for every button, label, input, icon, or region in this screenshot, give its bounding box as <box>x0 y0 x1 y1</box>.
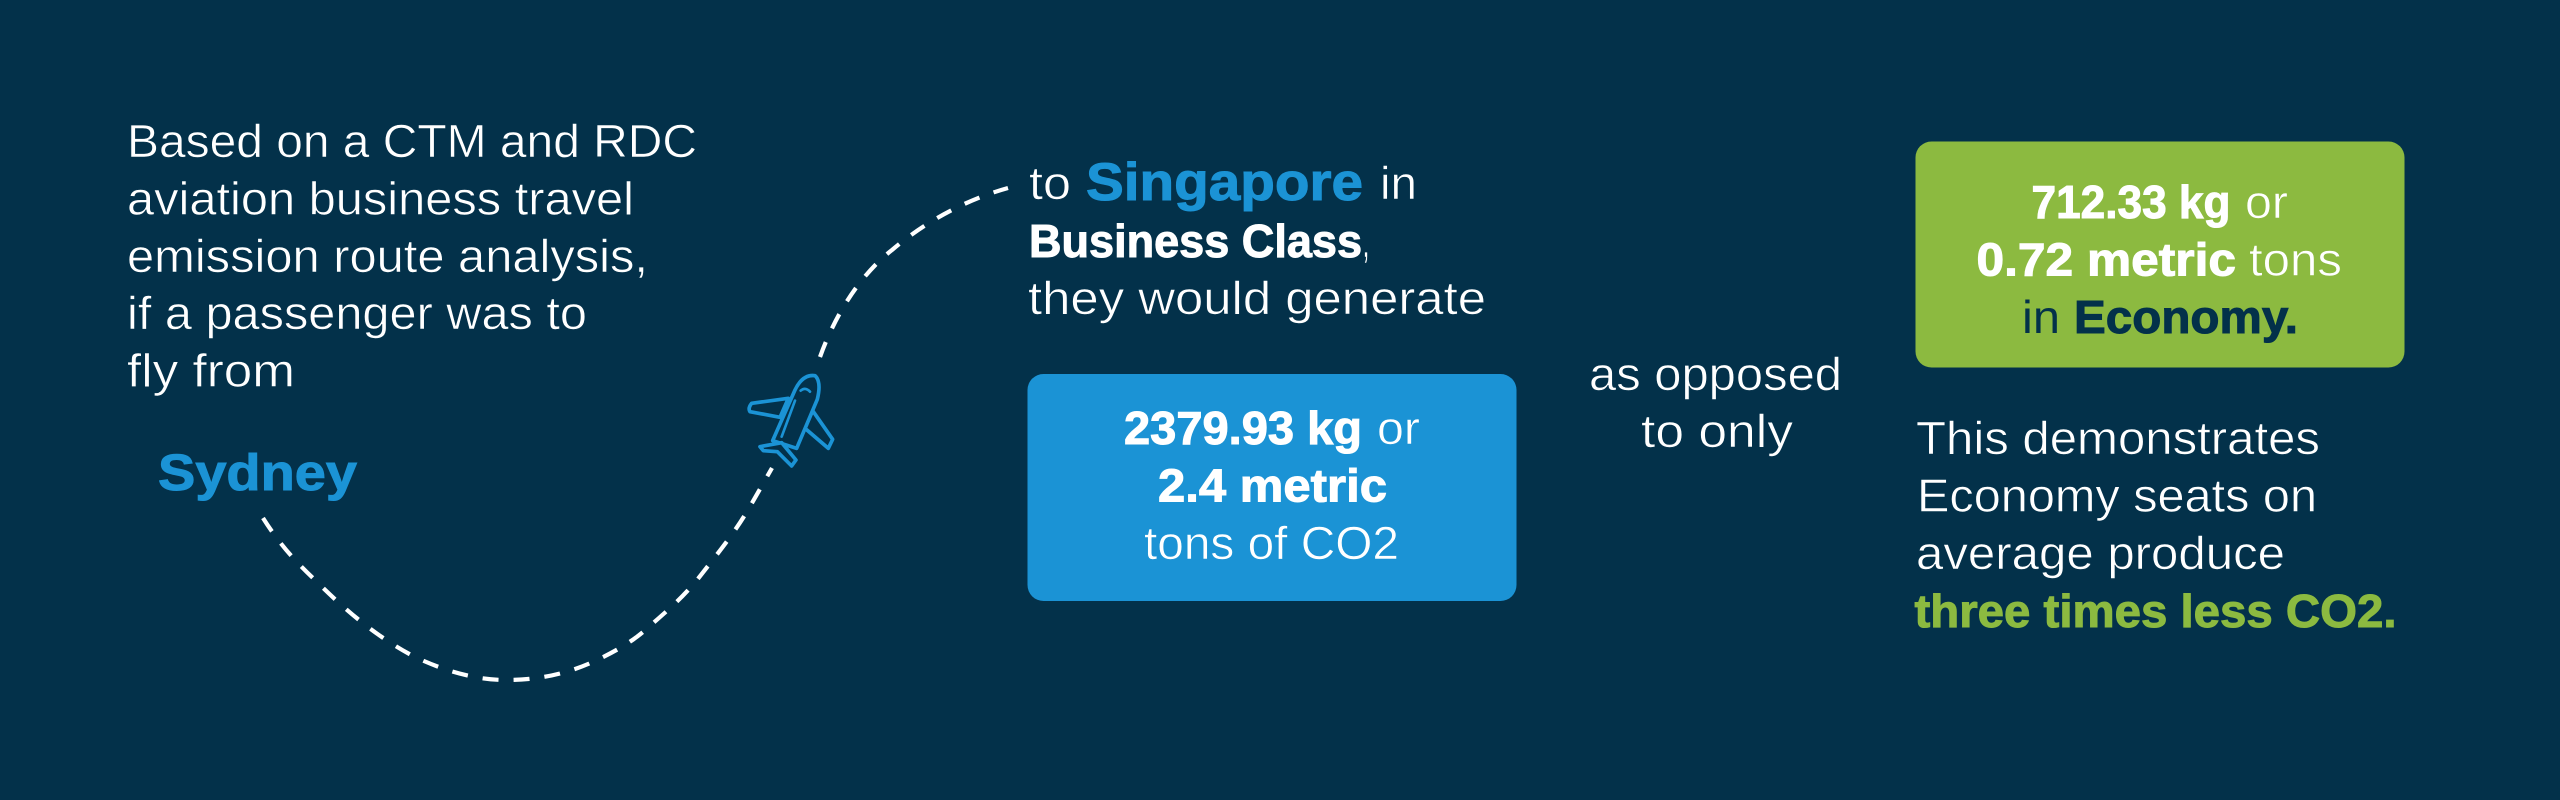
text block: destination: , <box>1362 215 1370 267</box>
text block: destination: they would generate <box>1028 272 1486 324</box>
panel: business class emissions: 2.4 metric <box>1158 460 1387 512</box>
text block: conclusion: Economy seats on <box>1917 470 2317 522</box>
icon: airplane <box>749 376 833 466</box>
text block: as opposed to only <box>1589 348 1842 457</box>
text block: destination <box>1028 153 1486 324</box>
panel: business class emissions: or <box>1377 402 1420 454</box>
panel: economy emissions: 712.33 kg <box>2032 176 2230 228</box>
text block: conclusion <box>1914 412 2396 637</box>
text block: intro <box>127 115 697 396</box>
text block: conclusion: three times less CO2. <box>1914 585 2396 637</box>
text block: intro: emission route analysis, <box>127 230 648 282</box>
text block: as opposed to only: as opposed <box>1589 348 1842 400</box>
text block: intro: if a passenger was to <box>127 287 587 339</box>
panel: economy emissions <box>1916 142 2404 368</box>
panel: economy emissions: 0.72 metric <box>1976 234 2236 286</box>
text block: destination: in <box>1380 157 1417 209</box>
panel: economy emissions: Economy. <box>2074 291 2298 343</box>
text block: conclusion: average produce <box>1916 527 2285 579</box>
text block: intro: Based on a CTM and RDC <box>127 115 697 167</box>
text block: intro: aviation business travel <box>127 172 634 224</box>
panel: economy emissions: or <box>2245 176 2288 228</box>
panel: economy emissions: tons <box>2249 234 2342 286</box>
text block: destination: Business Class <box>1029 215 1362 267</box>
text block: destination: Singapore <box>1086 153 1363 212</box>
panel: business class emissions <box>1028 374 1516 601</box>
panel: economy emissions: in <box>2022 291 2060 343</box>
origin label: Sydney: Sydney <box>158 444 358 501</box>
text block: conclusion: This demonstrates <box>1916 412 2320 464</box>
arrow: dashed flight route <box>263 188 1008 680</box>
panel: business class emissions: tons of CO2 <box>1144 517 1399 569</box>
text block: as opposed to only: to only <box>1641 405 1793 457</box>
panel: business class emissions: 2379.93 kg <box>1124 402 1362 454</box>
text block: destination: to <box>1029 157 1071 209</box>
text block: intro: fly from <box>127 344 295 396</box>
